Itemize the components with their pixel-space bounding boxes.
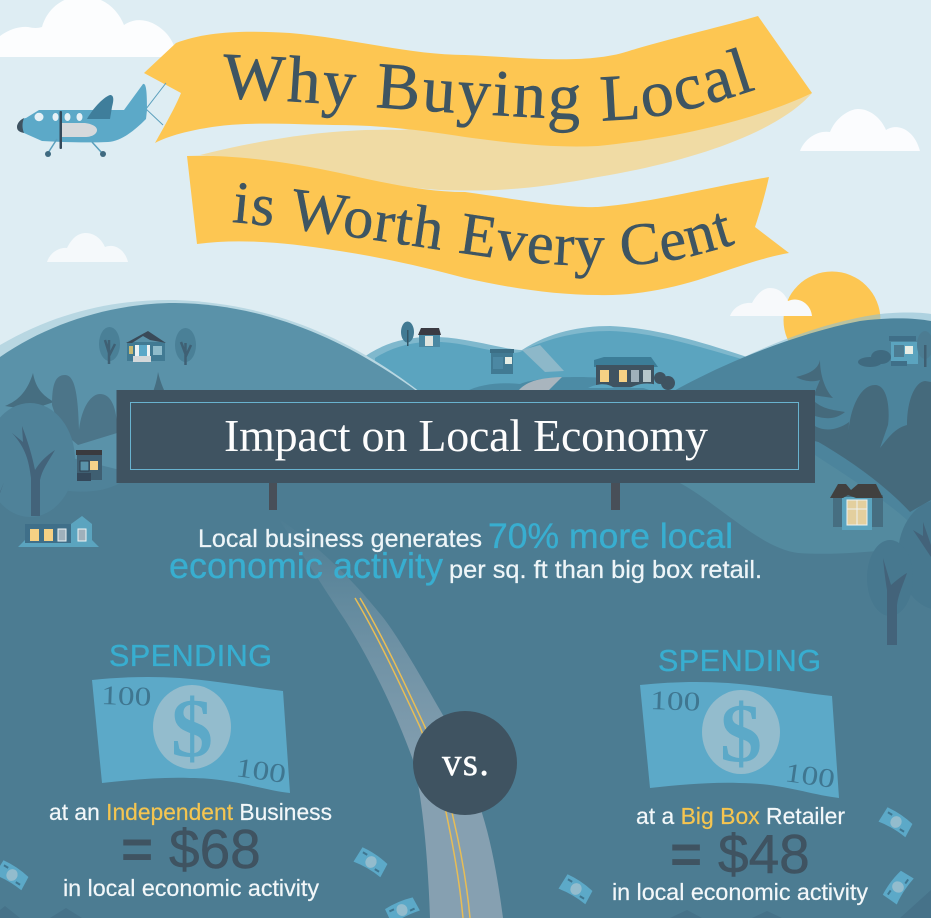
small house left (76, 450, 102, 481)
right hill (672, 318, 931, 660)
right hill halo (680, 312, 931, 480)
wing (87, 95, 113, 119)
cloud: top left (0, 0, 176, 57)
intro text: economic activity (169, 546, 443, 586)
vs badge: vs. (442, 741, 489, 784)
spending label: SPENDING (658, 644, 821, 678)
activity caption: in local economic activity (612, 879, 868, 905)
business caption: at an Independent Business (49, 799, 332, 825)
far hill lower band (465, 377, 655, 392)
right spruce tree (796, 360, 849, 443)
long house left (18, 516, 99, 547)
scattered mini bills (0, 807, 915, 918)
hilltop tree and house centre (401, 322, 441, 347)
cloud: right (800, 109, 920, 151)
left foreground slope (0, 440, 120, 492)
fuselage (17, 84, 147, 142)
nose (17, 118, 24, 133)
windows (34, 113, 82, 121)
banknote: 100 (650, 685, 701, 717)
ribbon fold shadow (200, 93, 812, 190)
centre long house (588, 357, 675, 390)
banner: Why Buying Local (144, 16, 812, 146)
amount: $48 (718, 823, 810, 885)
intro text: Local business generates (198, 525, 482, 553)
right mid hill (680, 455, 931, 640)
hilltop house right (858, 331, 931, 367)
intro text: per sq. ft than big box retail. (449, 556, 762, 584)
foreground ground (0, 470, 931, 918)
spruce tree left (5, 373, 54, 410)
hilltop trees and house left (99, 327, 196, 365)
amount (670, 823, 810, 885)
amount: = (670, 823, 702, 885)
spruce tip behind billboard (153, 372, 165, 392)
house with window right (830, 484, 883, 530)
near road piece (518, 377, 562, 391)
cloud: by the sun (730, 288, 812, 316)
banknote: $ (720, 687, 762, 780)
banner: is Worth Every Cent (187, 156, 789, 296)
sign inner border (130, 402, 798, 470)
intro text: 70% more local (488, 516, 733, 556)
banknote: 100 (234, 752, 288, 789)
plane towing ropes (146, 83, 166, 125)
amount (121, 818, 261, 880)
left hill (0, 303, 420, 560)
banknote: 100 (101, 680, 152, 712)
heading line 2: is Worth Every Cent (232, 182, 736, 279)
banknote: 100 (783, 757, 837, 794)
banknote: $ (171, 682, 213, 775)
sign board (116, 390, 815, 483)
right trees (867, 500, 931, 645)
spending label: SPENDING (109, 639, 272, 673)
bottom mountain tips (0, 890, 931, 918)
amount: $68 (169, 818, 261, 880)
vs badge (413, 711, 517, 815)
retailer caption: at a Big Box Retailer (636, 803, 845, 829)
far hills (375, 331, 745, 420)
amount: = (121, 818, 153, 880)
big left tree (0, 403, 75, 517)
posts (269, 480, 277, 510)
winding far road (522, 345, 564, 372)
banknote (92, 677, 290, 793)
road (277, 517, 503, 918)
banknote (640, 682, 839, 798)
sign title: Impact on Local Economy (224, 410, 708, 461)
road centre lines (355, 598, 470, 918)
left hill halo (0, 300, 420, 400)
cloud: small left (47, 233, 128, 262)
heading line 1: Why Buying Local (224, 47, 756, 134)
panel: independent business (49, 639, 332, 901)
right dark hill with bushes (815, 381, 931, 512)
landing gear (45, 139, 106, 157)
activity caption: in local economic activity (63, 875, 319, 901)
billboard (116, 390, 815, 510)
intro text (169, 516, 762, 586)
propeller (60, 111, 62, 149)
airplane (17, 84, 147, 157)
far hill halo (360, 326, 750, 420)
panel: big box retailer (612, 644, 868, 905)
small house centre (490, 349, 514, 374)
cargo door (62, 123, 97, 137)
sun (784, 272, 880, 368)
dark bushes left (52, 375, 117, 445)
